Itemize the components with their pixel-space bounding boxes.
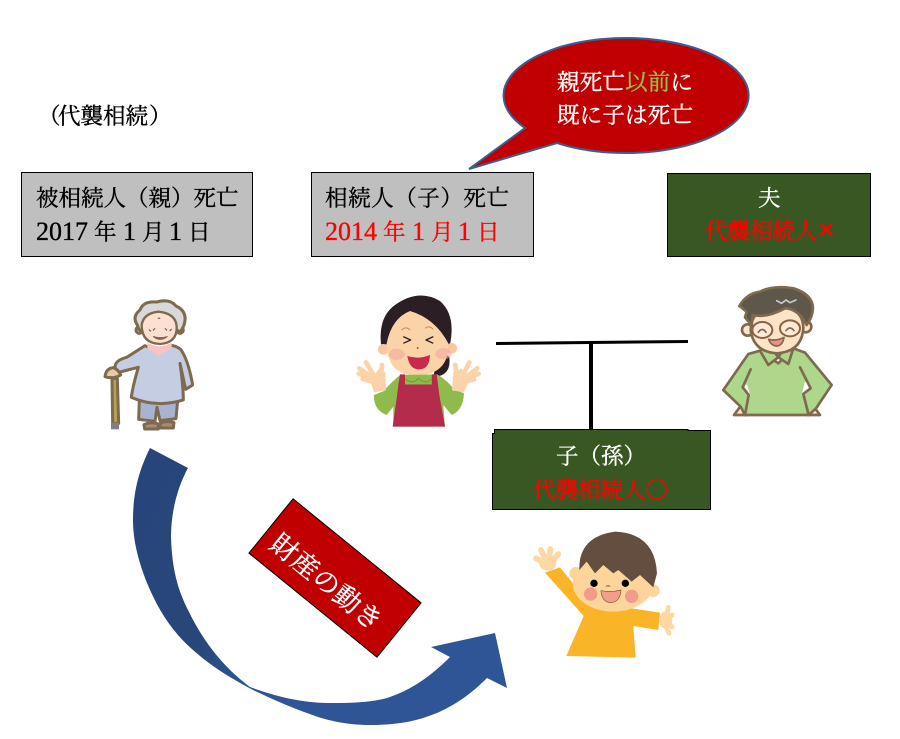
panel: deceased parent: 日: [188, 220, 211, 245]
panel: deceased child: 2014: [325, 217, 377, 246]
panel: husband: 代襲相続人: [705, 219, 818, 244]
panel: grandchild: 子（孫）: [556, 444, 646, 469]
panel: deceased child: [312, 172, 534, 256]
speech bubble: [469, 38, 749, 169]
panel: deceased child: 日: [477, 220, 500, 245]
icon: mother in apron: [359, 296, 479, 427]
panel: deceased parent: 1: [123, 217, 136, 246]
title: 代襲相続: [58, 104, 148, 129]
family tree connector lines: [496, 342, 688, 431]
panel: husband: 夫: [758, 186, 781, 211]
panel: deceased parent: 月: [142, 220, 165, 245]
icon: grandchild waving: [536, 532, 672, 658]
panel: deceased parent: 年: [94, 220, 117, 245]
panel: husband: [668, 174, 870, 256]
panel: deceased parent: 1: [169, 217, 182, 246]
panel: deceased child: 年: [383, 220, 406, 245]
panel: deceased child: 月: [431, 220, 454, 245]
panel: deceased parent: 2017: [36, 217, 88, 246]
curved arrow: estate flow: [133, 448, 507, 725]
panel: deceased child: 1: [458, 217, 471, 246]
panel: husband: ×: [818, 214, 834, 245]
icon: husband with glasses: [723, 287, 832, 415]
label: estate movement: [249, 499, 421, 657]
panel: grandchild: [492, 430, 710, 510]
label: estate movement: 財産の動き: [264, 528, 388, 637]
panel: grandchild: 代襲相続人〇: [533, 478, 668, 503]
speech bubble: 親死亡以前に: [557, 70, 693, 95]
title: （: [38, 104, 61, 129]
panel: deceased child: 1: [412, 217, 425, 246]
panel: deceased parent: 被相続人（親）死亡: [36, 186, 239, 211]
speech bubble: 既に子は死亡: [557, 103, 693, 128]
icon: grandmother: [105, 301, 193, 429]
title: ）: [149, 104, 172, 129]
panel: deceased child: 相続人（子）死亡: [325, 186, 509, 211]
panel: deceased parent: [22, 172, 252, 256]
